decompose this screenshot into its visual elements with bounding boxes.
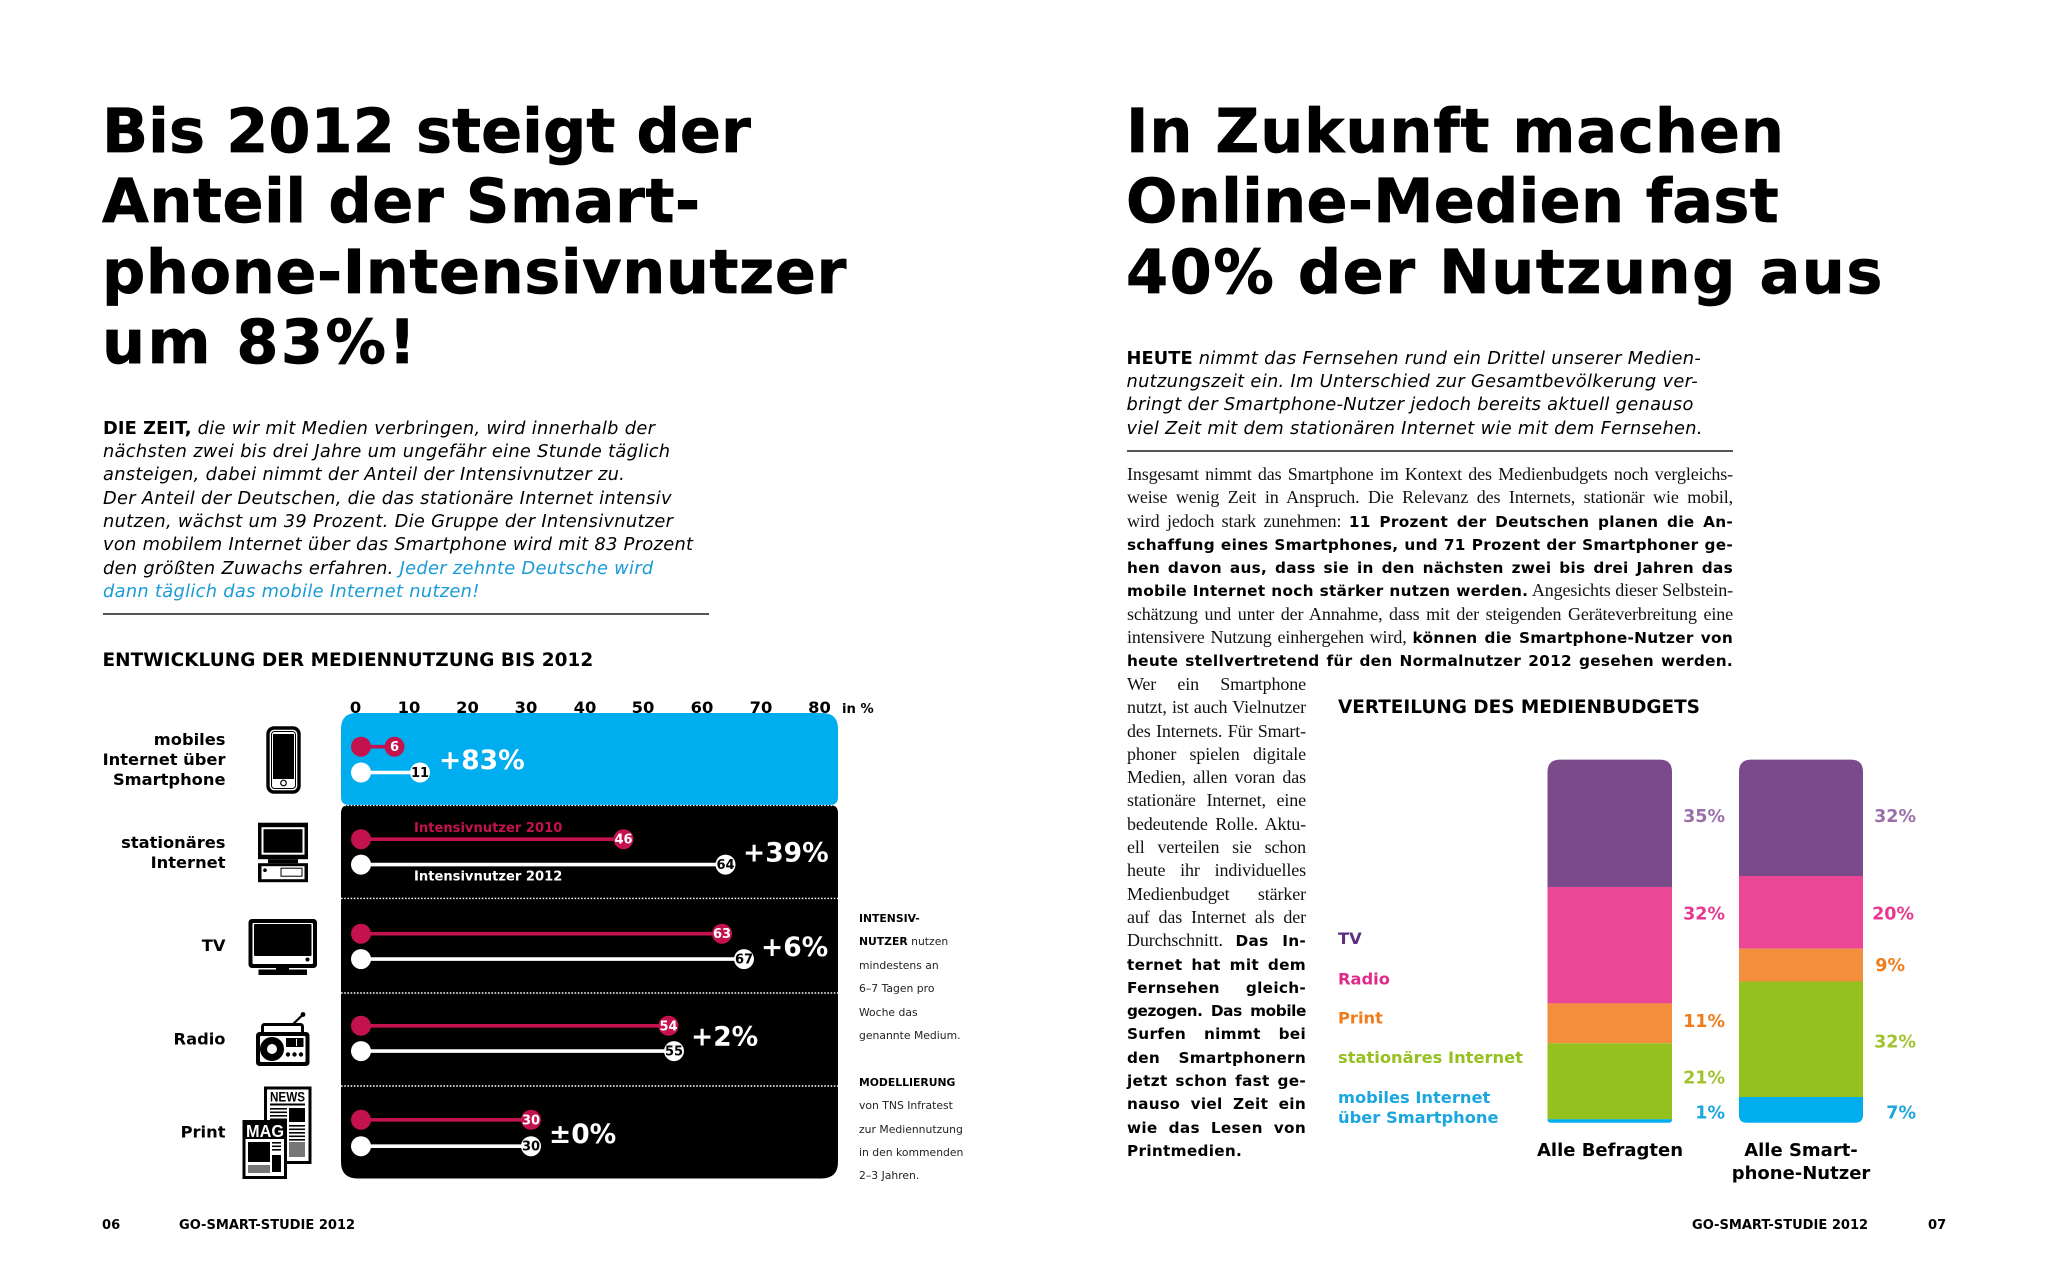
row: radio: [351, 1016, 758, 1061]
value labels: smartphone users: 9%: [1875, 956, 1905, 976]
body text: narrow column: ternet hat mit dem: [1127, 956, 1306, 974]
row: stationary internet: 64: [716, 858, 735, 873]
panel: mobile internet row: +83%: [439, 745, 525, 776]
row: stationary internet: Intensivnutzer 2010: [414, 821, 562, 836]
axis labels: 40: [574, 698, 596, 717]
value labels: smartphone users: [1872, 807, 1916, 1123]
intro text: right page: nutzungszeit ein. Im Unterschied zur Gesamtbevölkerung ver-: [1126, 371, 1698, 392]
axis labels: 50: [632, 698, 654, 717]
chart: bar all respondents: [1548, 760, 1672, 1123]
body text: full width: hen davon aus, dass sie in den nächsten zwei bis drei Jahren das: [1127, 559, 1733, 577]
row: radio: 54: [659, 1019, 678, 1034]
body text: full width: schaffung eines Smartphones, und 71 Prozent der Smartphoner ge-: [1127, 536, 1733, 554]
heading: media usage chart: ENTWICKLUNG DER MEDIENNUTZUNG BIS 2012: [102, 650, 593, 671]
side notes: von TNS Infratest: [859, 1099, 953, 1112]
body text: narrow column: Wer ein Smartphone: [1127, 674, 1306, 694]
value labels: all respondents: 21%: [1683, 1068, 1725, 1088]
row: radio: +2%: [691, 1022, 758, 1053]
body text: narrow column: [1126, 674, 1306, 1160]
icon: TV: [248, 919, 317, 975]
body text: narrow column: Medienbudget stärker: [1127, 884, 1306, 904]
bar captions: Alle Befragten: [1537, 1140, 1683, 1161]
body text: full width: intensivere Nutzung einhergehen wird, können die Smartphone-Nutzer von: [1127, 627, 1733, 647]
title: right page: Online-Medien fast: [1126, 167, 1779, 237]
axis labels: 60: [691, 698, 713, 717]
icon: desktop computer: [258, 823, 308, 882]
side notes: zur Mediennutzung: [859, 1123, 963, 1136]
row: print: ±0%: [549, 1119, 616, 1150]
axis labels: 70: [750, 698, 772, 717]
body text: full width: mobile Internet noch stärker nutzen werden. Angesichts dieser Selbstein-: [1127, 580, 1733, 600]
intro text: left page: [103, 418, 694, 602]
side notes: genannte Medium.: [859, 1029, 961, 1042]
intro text: left page: dann täglich das mobile Internet nutzen!: [103, 581, 480, 602]
legend: TV: [1338, 929, 1362, 948]
row labels: Print: [181, 1122, 226, 1142]
row: TV: 67: [735, 953, 753, 968]
legend: stationäres Internet: [1338, 1048, 1523, 1067]
row labels: Smartphone: [113, 770, 226, 789]
intro text: left page: ansteigen, dabei nimmt der Anteil der Intensivnutzer zu.: [103, 464, 625, 485]
title: left page: phone-Intensivnutzer: [102, 238, 847, 308]
legend: mobiles Internet: [1338, 1088, 1491, 1107]
side notes: [859, 912, 963, 1182]
body text: narrow column: Surfen nimmt bei: [1127, 1025, 1306, 1043]
legend: über Smartphone: [1338, 1108, 1499, 1127]
row: TV: [351, 924, 828, 969]
footer: left page: GO-SMART-STUDIE 2012: [179, 1218, 355, 1233]
axis labels: [350, 698, 874, 717]
body text: narrow column: jetzt schon fast ge-: [1127, 1072, 1306, 1090]
chart: bar smartphone users: [1739, 760, 1863, 1123]
row labels: stationäres: [121, 833, 226, 852]
body text: narrow column: ell verteilen sie schon: [1127, 837, 1306, 857]
row labels: Internet über: [103, 750, 226, 769]
side notes: in den kommenden: [859, 1146, 963, 1159]
row labels: mobiles: [154, 730, 226, 749]
footer: left page: 06: [102, 1218, 120, 1233]
value labels: smartphone users: 32%: [1874, 1033, 1916, 1053]
body text: narrow column: phoner spielen digitale: [1127, 744, 1306, 764]
body text: narrow column: Printmedien.: [1127, 1142, 1242, 1160]
row: stationary internet: Intensivnutzer 2012: [414, 870, 562, 884]
intro text: left page: Der Anteil der Deutschen, die das stationäre Internet intensiv: [103, 488, 672, 509]
body text: narrow column: nauso viel Zeit ein: [1127, 1095, 1306, 1113]
axis labels: 10: [398, 698, 420, 717]
row: stationary internet: +39%: [743, 838, 829, 869]
axis labels: 30: [515, 698, 537, 717]
side notes: mindestens an: [859, 959, 939, 972]
title: right page: 40% der Nutzung aus: [1126, 238, 1884, 308]
side notes: INTENSIV-: [859, 912, 920, 925]
panel: black chart background: [341, 805, 838, 1178]
body text: full width: Insgesamt nimmt das Smartphone im Kontext des Medienbudgets noch vergleichs-: [1127, 464, 1733, 484]
body text: full width: weise wenig Zeit in Anspruch. Die Relevanz des Internets, stationär wie mobil,: [1127, 487, 1733, 507]
heading: media budget chart: VERTEILUNG DES MEDIENBUDGETS: [1338, 697, 1700, 718]
side notes: Woche das: [859, 1006, 918, 1019]
value labels: all respondents: 35%: [1683, 807, 1725, 827]
intro text: left page: den größten Zuwachs erfahren. Jeder zehnte Deutsche wird: [103, 558, 654, 579]
side notes: NUTZER nutzen: [859, 935, 948, 948]
footer: right page: GO-SMART-STUDIE 2012: [1692, 1218, 1868, 1233]
title: left page: um 83%!: [102, 308, 418, 378]
row: print: [351, 1110, 616, 1156]
footer: left page: [102, 1218, 355, 1233]
body text: narrow column: nutzt, ist auch Vielnutzer: [1127, 697, 1306, 717]
body text: narrow column: Medien, allen voran das: [1127, 767, 1306, 787]
icon: newspaper and magazine: MAG: [246, 1121, 284, 1141]
bar captions: phone-Nutzer: [1732, 1163, 1870, 1184]
axis labels: in %: [842, 702, 874, 717]
legend: Print: [1338, 1008, 1383, 1027]
axis labels: 80: [808, 698, 831, 717]
value labels: smartphone users: 32%: [1874, 807, 1916, 827]
title: left page: Bis 2012 steigt der: [102, 97, 751, 167]
panel: mobile internet row: [341, 713, 838, 805]
icon: newspaper and magazine: [242, 1086, 312, 1179]
body text: narrow column: Fernsehen gleich-: [1127, 979, 1306, 997]
value labels: all respondents: 32%: [1683, 904, 1725, 924]
footer: right page: 07: [1928, 1218, 1946, 1233]
icon: newspaper and magazine: NEWS: [270, 1088, 305, 1104]
panel: mobile internet row: 11: [411, 766, 429, 781]
intro text: right page: bringt der Smartphone-Nutzer jedoch bereits aktuell genauso: [1126, 394, 1694, 415]
body text: narrow column: auf das Internet als der: [1127, 907, 1306, 927]
body text: full width: [1127, 464, 1733, 670]
value labels: smartphone users: 20%: [1872, 904, 1914, 924]
row: print: 30: [522, 1113, 540, 1128]
title: right page: In Zukunft machen: [1126, 97, 1785, 167]
side notes: 2–3 Jahren.: [859, 1169, 919, 1182]
row: TV: +6%: [761, 932, 828, 963]
row labels: Radio: [174, 1030, 226, 1049]
row: stationary internet: 46: [614, 833, 633, 848]
value labels: all respondents: 11%: [1683, 1012, 1725, 1032]
body text: full width: heute stellvertretend für den Normalnutzer 2012 gesehen werden.: [1127, 652, 1733, 670]
intro text: left page: nutzen, wächst um 39 Prozent. Die Gruppe der Intensivnutzer: [103, 511, 673, 532]
icon: radio: [256, 1012, 310, 1066]
row: stationary internet: [351, 821, 829, 884]
footer: right page: [1692, 1218, 1946, 1233]
title: left page: [102, 97, 847, 378]
value labels: all respondents: 1%: [1695, 1103, 1725, 1123]
row labels: Internet: [151, 853, 226, 872]
body text: full width: wird jedoch stark zunehmen: 11 Prozent der Deutschen planen die An-: [1127, 511, 1733, 531]
intro text: right page: HEUTE nimmt das Fernsehen rund ein Drittel unserer Medien-: [1126, 348, 1701, 368]
body text: narrow column: bedeutende Rolle. Aktu-: [1127, 814, 1306, 834]
body text: narrow column: wie das Lesen von: [1127, 1119, 1306, 1137]
row: print: 30: [522, 1140, 540, 1155]
body text: narrow column: heute ihr individuelles: [1127, 860, 1306, 880]
intro text: left page: nächsten zwei bis drei Jahre um ungefähr eine Stunde täglich: [103, 441, 670, 462]
row labels: TV: [202, 936, 226, 955]
axis labels: 0: [350, 698, 361, 717]
body text: narrow column: Durchschnitt. Das In-: [1127, 930, 1306, 950]
row: TV: 63: [713, 927, 731, 942]
bar captions: Alle Smart-: [1744, 1140, 1858, 1161]
title: right page: [1126, 97, 1884, 308]
body text: narrow column: stationäre Internet, eine: [1127, 790, 1306, 810]
intro text: left page: DIE ZEIT, die wir mit Medien verbringen, wird innerhalb der: [103, 418, 655, 438]
intro text: right page: viel Zeit mit dem stationären Internet wie mit dem Fernsehen.: [1126, 418, 1703, 439]
body text: full width: schätzung und unter der Annahme, dass mit der steigenden Geräteverbreitung eine: [1127, 604, 1733, 624]
bar captions: [1537, 1140, 1870, 1184]
intro text: right page: [1126, 348, 1703, 439]
body text: narrow column: des Internets. Für Smart-: [1127, 721, 1306, 741]
body text: narrow column: den Smartphonern: [1127, 1049, 1306, 1067]
legend: [1338, 929, 1523, 1127]
side notes: 6–7 Tagen pro: [859, 982, 934, 995]
legend: Radio: [1338, 970, 1390, 988]
body text: narrow column: gezogen. Das mobile: [1127, 1002, 1306, 1020]
intro text: left page: von mobilem Internet über das Smartphone wird mit 83 Prozent: [103, 534, 693, 555]
value labels: smartphone users: 7%: [1886, 1103, 1916, 1123]
icon: smartphone: [268, 728, 299, 792]
axis labels: 20: [456, 698, 479, 717]
title: left page: Anteil der Smart-: [102, 167, 701, 237]
panel: mobile internet row: 6: [390, 740, 399, 755]
row: radio: 55: [665, 1045, 683, 1060]
value labels: all respondents: [1683, 807, 1725, 1123]
side notes: MODELLIERUNG: [859, 1076, 955, 1089]
row labels: [103, 730, 226, 1142]
